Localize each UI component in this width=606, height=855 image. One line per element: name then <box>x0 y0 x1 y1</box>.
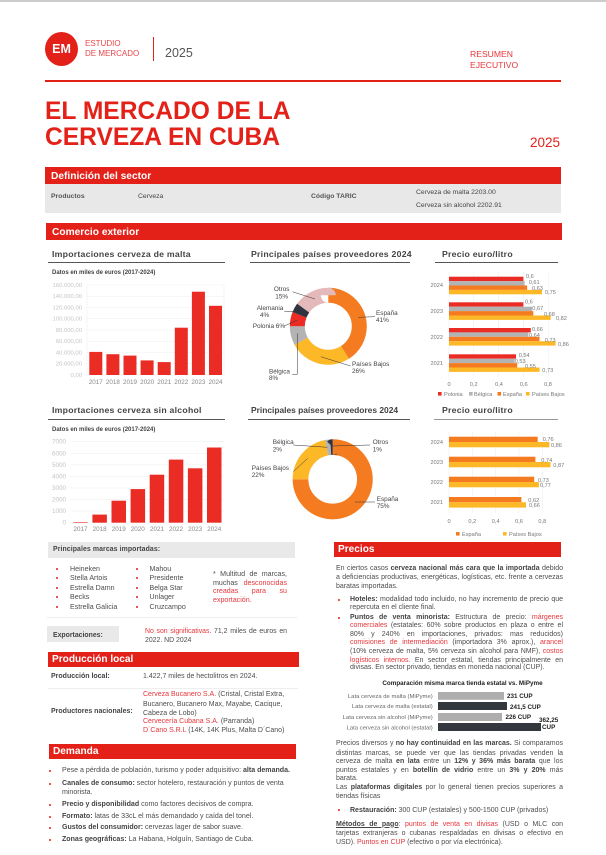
panel: precios conclusiones: tiendas físicas <box>336 793 380 800</box>
donut chart: Polonia 6% <box>253 323 285 330</box>
report type: EJECUTIVO <box>470 60 518 70</box>
horizontal bar chart <box>430 272 569 398</box>
panel: precios conclusiones: distintas marcas, se puede ver que las tiendas privadas venden la <box>336 750 563 757</box>
bar chart: 1000 <box>52 508 66 515</box>
heading: producción local <box>48 652 299 667</box>
bar chart: 2018 <box>106 379 120 386</box>
logo text: DE MERCADO <box>85 49 139 58</box>
bar chart: 2023 <box>191 379 206 386</box>
heading: comercio exterior: Comercio exterior <box>52 227 139 238</box>
horizontal bar chart: 0,66 <box>532 327 543 333</box>
panel: precios texto: divisas. En sector privado, tiendas en moneda nacional (CUP). <box>350 664 545 671</box>
panel: precios conclusiones: cerveza de malta en lata entre un 12% y 36% más barata que los <box>336 758 563 765</box>
bar chart <box>53 283 224 386</box>
bar chart: 40.000,00 <box>56 350 83 356</box>
bar chart: 3000 <box>52 485 66 492</box>
horizontal bar chart: 0 <box>447 519 451 525</box>
note: exportación. <box>213 596 252 604</box>
panel: precios texto: a deficiencias productivas, energéticas, logísticas, etc. frente a cervezas <box>336 574 563 580</box>
horizontal bar chart: 0,63 <box>532 286 543 292</box>
panel: precios conclusiones: barata. <box>336 775 358 782</box>
panel: producción local: Bucanero, Bucanero Max, Mayabe, Cacique, <box>143 700 282 708</box>
panel: demanda: Gustos del consumidor: cervezas lager de sabor suave. <box>62 824 243 831</box>
bar chart: 0 <box>62 520 66 527</box>
subtitle: Datos en miles de euros (2017-2024) <box>52 427 155 433</box>
report type <box>470 49 518 70</box>
panel: precios conclusiones: Restauración: 300 CUP (estatales) y 500-1500 CUP (privados) <box>350 807 548 814</box>
horizontal bar chart: 2024 <box>431 283 443 289</box>
bar chart: 80.000,00 <box>56 328 83 334</box>
panel: importaciones cerveza sin alcohol <box>48 405 225 533</box>
heading: Principales países proveedores 2024 <box>251 249 412 259</box>
horizontal bar chart: 0,76 <box>543 437 554 443</box>
donut chart: Países Bajos <box>252 465 289 472</box>
subtitle: Datos en miles de euros (2017-2024) <box>52 270 155 276</box>
comparison bar chart: CUP <box>542 724 555 731</box>
horizontal bar chart: España <box>462 532 482 538</box>
donut chart: 2% <box>273 446 282 453</box>
horizontal bar chart: 0,4 <box>492 519 500 525</box>
product row: Código TARIC <box>311 193 357 200</box>
heading: Importaciones cerveza de malta <box>52 249 191 259</box>
icon: EM circle <box>45 32 78 66</box>
text: 0,86 <box>558 342 569 348</box>
label <box>47 626 119 642</box>
panel: demanda: Precio y disponibilidad como factores decisivos de compra. <box>62 801 254 808</box>
brand list <box>56 565 186 611</box>
donut chart: 8% <box>269 375 279 382</box>
title: EL MERCADO DE LA <box>45 98 290 125</box>
horizontal bar chart: Países Bajos <box>532 392 565 398</box>
panel: principales marcas importadas <box>47 542 297 618</box>
panel: precio euro/litro malta <box>430 249 569 398</box>
donut chart: 41% <box>376 317 389 324</box>
heading: precios: Precios <box>338 544 374 555</box>
product row <box>51 189 502 209</box>
brand list: Mahou <box>150 565 171 573</box>
donut chart <box>253 286 398 382</box>
horizontal bar chart: 0,86 <box>551 443 562 449</box>
value: No son significativas. 71,2 miles de euros en <box>145 628 287 635</box>
heading: Precio euro/litro <box>442 405 513 415</box>
logo text <box>85 39 139 58</box>
chart title: Comparación misma marca tienda estatal vs. MiPyme <box>382 680 543 687</box>
icon: EM circle: EM <box>52 42 71 56</box>
panel: principales países proveedores sin alcohol <box>248 405 410 520</box>
product row: Cerveza sin alcohol 2202.91 <box>416 202 502 209</box>
horizontal bar chart: 2021 <box>431 500 443 506</box>
panel: demanda: Pese a pérdida de población, turismo y poder adquisitivo: alta demanda. <box>62 767 290 774</box>
bar chart: 2021 <box>157 379 172 386</box>
panel: demanda: Zonas geográficas: La Habana, Holguín, Santiago de Cuba. <box>62 836 254 843</box>
horizontal bar chart: 0,66 <box>529 503 540 509</box>
value <box>145 628 287 644</box>
donut chart: Otros <box>274 286 290 293</box>
heading: precios <box>334 542 561 557</box>
bar chart: 60.000,00 <box>56 339 83 345</box>
horizontal bar chart: 0,75 <box>545 290 556 296</box>
comparison bar chart: 241,5 CUP <box>510 704 541 711</box>
bar chart: 2000 <box>52 497 66 504</box>
bar chart: 120.000,00 <box>53 306 83 312</box>
donut chart: Países Bajos <box>352 361 389 368</box>
horizontal bar chart: 0,62 <box>528 498 539 504</box>
horizontal bar chart: 0,8 <box>544 382 552 388</box>
heading: Principales marcas importadas: <box>53 546 160 553</box>
horizontal bar chart: Países Bajos <box>509 532 542 538</box>
heading: demanda <box>49 744 296 759</box>
panel: definición del sector <box>45 167 561 213</box>
bar chart: 2018 <box>93 526 107 533</box>
horizontal bar chart: 0,6 <box>525 299 533 305</box>
panel: demanda <box>49 766 290 843</box>
bar chart: 2020 <box>140 379 155 386</box>
header year: 2025 <box>165 46 193 60</box>
panel: precios conclusiones: tarjetas extranjeras o cubanas respaldadas en divisas o efectivo en <box>336 830 563 837</box>
comparison bar chart: 362,25 <box>539 717 559 724</box>
heading: Definición del sector <box>51 171 151 182</box>
horizontal bar chart: 0,4 <box>495 382 503 388</box>
comparison bar chart: Lata cerveza sin alcohol (MiPyme) <box>343 715 433 721</box>
bar chart: 2017 <box>89 379 103 386</box>
panel: precios conclusiones: Precios diversos y no hay continuidad en las marcas. Si comparamos <box>336 740 563 747</box>
donut chart: 22% <box>252 472 265 479</box>
panel: precios texto: 80% y 240% en importaciones, privados: mas reducidos) <box>350 631 563 638</box>
product row: Productos <box>51 193 85 200</box>
brand list: Stella Artois <box>70 574 107 582</box>
donut chart: 26% <box>352 368 365 375</box>
panel: precios texto: Hoteles: modalidad todo incluido, no hay incremento de precio que <box>350 596 563 602</box>
horizontal bar chart: 2021 <box>431 361 443 367</box>
panel: precios conclusiones: Las plataformas digitales por lo general tienen precios superiores a <box>336 784 563 791</box>
panel: precio euro/litro sin alcohol <box>430 405 564 538</box>
comparison bar chart <box>343 680 559 732</box>
logo text: ESTUDIO <box>85 39 121 48</box>
panel: precios conclusiones <box>336 740 563 846</box>
horizontal bar chart: 2024 <box>431 440 443 446</box>
panel: precios conclusiones: Métodos de pago: puntos de venta en divisas (USD o MLC con <box>336 820 563 828</box>
comparison bar chart: 231 CUP <box>507 693 533 700</box>
heading: Importaciones cerveza sin alcohol <box>52 405 202 415</box>
bar chart: 2023 <box>188 526 203 533</box>
panel: precios texto: repercuta en el cliente final. <box>350 604 436 611</box>
panel: producción local: 1.422,7 miles de hectolitros en 2024. <box>143 673 257 680</box>
horizontal bar chart: 0,87 <box>553 463 564 469</box>
brand list: Heineken <box>70 565 100 573</box>
note: * Multitud de marcas, <box>213 570 287 578</box>
panel: importaciones cerveza de malta <box>48 249 225 386</box>
label: Exportaciones: <box>53 632 103 639</box>
heading: Precio euro/litro <box>442 249 513 259</box>
donut chart: 1% <box>373 446 382 453</box>
production row: Producción local: <box>51 673 110 680</box>
product row: Cerveza de malta 2203.00 <box>416 189 496 196</box>
panel: precios texto: baratas importadas. <box>336 583 398 590</box>
brand list: Presidente <box>150 574 183 582</box>
horizontal bar chart: 2023 <box>431 460 443 466</box>
heading <box>48 542 295 558</box>
brand list: Unlager <box>150 593 174 601</box>
brand list: Cruzcampo <box>150 603 186 611</box>
horizontal bar chart: 2022 <box>431 480 443 486</box>
donut chart: 15% <box>275 293 288 300</box>
bar chart: 2024 <box>207 526 222 533</box>
horizontal bar chart: 0,67 <box>532 306 543 312</box>
bar chart: 20.000,00 <box>56 362 83 368</box>
horizontal bar chart: 0,6 <box>526 274 534 280</box>
panel: producción local <box>48 672 298 734</box>
report type: RESUMEN <box>470 49 513 59</box>
horizontal bar chart: 0,68 <box>544 312 555 318</box>
comparison bar chart: Lata cerveza de malta (estatal) <box>352 704 433 710</box>
header logo <box>45 32 193 66</box>
value: 2022. ND 2024 <box>145 637 191 644</box>
heading: comercio exterior <box>46 223 562 240</box>
donut chart: Otros <box>373 439 388 446</box>
horizontal bar chart: Bélgica <box>474 392 493 398</box>
horizontal bar chart: 0,2 <box>468 519 476 525</box>
bar chart: 2019 <box>112 526 126 533</box>
panel: precios texto: Puntos de venta minorista: Estructura de precio: márgenes <box>350 614 563 620</box>
panel: demanda: Formato: latas de 33cL el más demandado y caída del tonel. <box>62 813 253 820</box>
title year: 2025 <box>530 135 560 150</box>
bar chart: 6000 <box>52 450 66 457</box>
horizontal bar chart <box>430 432 564 538</box>
horizontal bar chart: 0,73 <box>538 478 549 484</box>
horizontal bar chart: 0,2 <box>470 382 478 388</box>
horizontal bar chart: 0,6 <box>520 382 528 388</box>
comparison bar chart: Lata cerveza de malta (MiPyme) <box>348 694 433 700</box>
horizontal bar chart: 0,73 <box>545 338 556 344</box>
horizontal bar chart: 0 <box>447 382 451 388</box>
bar chart: 100.000,00 <box>53 317 83 323</box>
donut chart: 75% <box>377 503 390 510</box>
bar chart: 4000 <box>52 473 66 480</box>
horizontal bar chart: España <box>503 392 523 398</box>
panel: precios texto: (10% cerveza de malta, 5% cerveza sin alcohol para NMF), costos <box>350 648 563 655</box>
donut chart: Alemania <box>257 305 284 312</box>
panel: principales países proveedores malta <box>250 249 412 382</box>
bar chart: 7000 <box>52 439 66 446</box>
horizontal bar chart: 0,54 <box>519 353 530 359</box>
panel: demanda: Canales de consumo: sector hotelero, restauración y puntos de venta <box>62 780 284 787</box>
brand list: Belga Star <box>150 584 183 592</box>
bar chart: 140.000,00 <box>53 294 83 300</box>
bar chart: 2017 <box>73 526 88 533</box>
panel: precios conclusiones: puntos estatales y en botellín de vidrio entre un 3% y 20% más <box>336 767 563 774</box>
title: CERVEZA EN CUBA <box>45 124 280 150</box>
brand list: Estrella Damn <box>70 584 115 592</box>
horizontal bar chart: 2022 <box>431 335 443 341</box>
horizontal bar chart: 0,74 <box>541 458 552 464</box>
bar chart: 2021 <box>150 526 164 533</box>
brand list: Estrella Galicia <box>70 603 117 611</box>
bar chart: 2020 <box>131 526 145 533</box>
donut chart: Bélgica <box>269 368 290 375</box>
panel: precios conclusiones: USD). Puntos en CUP (efectivo o por vía electrónica). <box>336 838 503 846</box>
donut chart: España <box>376 310 398 317</box>
bar chart: 2022 <box>169 526 183 533</box>
bar chart: 2019 <box>123 379 137 386</box>
panel: precios texto: En ciertos casos cerveza nacional más cara que la importada debido <box>336 564 563 572</box>
panel: producción local: D´Cano S.R.L (14K, 14K Plus, Malta D´Cano) <box>143 726 284 734</box>
horizontal bar chart: 2023 <box>431 309 443 315</box>
comparison bar chart: 226 CUP <box>506 714 531 721</box>
panel: exportaciones <box>47 626 287 644</box>
note <box>213 570 287 604</box>
panel: producción local: Cerveza Bucanero S.A. (Cristal, Cristal Extra, <box>143 691 284 698</box>
bar chart: 2022 <box>174 379 189 386</box>
horizontal bar chart: 0,55 <box>525 364 536 370</box>
panel: demanda: minorista. <box>62 789 93 796</box>
horizontal bar chart: 0,61 <box>529 280 540 286</box>
bar chart: 160.000,00 <box>53 283 83 289</box>
note: muchas desconocidas <box>213 579 287 587</box>
donut chart: Bélgica <box>273 439 294 446</box>
donut chart: 4% <box>260 312 270 319</box>
bar chart <box>52 439 224 533</box>
panel: precios texto: comisiones de intermediación (importadora 3% aprox.), arancel <box>350 639 563 646</box>
text: 0,82 <box>556 316 567 322</box>
panel: precios texto: comerciales (estatales: 60% sobre productos en plaza o entre el <box>350 622 563 629</box>
heading: producción local: Producción local <box>52 654 133 665</box>
note: creadas para su <box>213 587 287 595</box>
donut chart <box>252 439 399 520</box>
bar chart: 0,00 <box>71 373 83 379</box>
horizontal bar chart: 0,53 <box>515 359 526 365</box>
horizontal bar chart: 0,73 <box>542 368 553 374</box>
heading: demanda: Demanda <box>53 746 98 757</box>
bar chart: 5000 <box>52 462 66 469</box>
brand list: Becks <box>70 593 89 601</box>
title <box>45 98 290 150</box>
horizontal bar chart: 0,8 <box>538 519 546 525</box>
horizontal bar chart: 0,6 <box>515 519 523 525</box>
product row: Cerveza <box>138 193 163 200</box>
panel: precios texto <box>336 564 563 671</box>
comparison bar chart: Lata cerveza sin alcohol (estatal) <box>347 726 433 732</box>
bar chart: 2024 <box>208 379 223 386</box>
producers: Productores nacionales: <box>51 708 133 714</box>
heading: Principales países proveedores 2024 <box>251 405 398 415</box>
panel: producción local: Cervecería Cubana S.A. (Parranda) <box>143 718 254 724</box>
horizontal bar chart: 0,64 <box>529 333 540 339</box>
heading <box>45 167 561 184</box>
horizontal bar chart: 0,77 <box>540 483 551 489</box>
panel: precios texto: logísticos internos. En sector estatal, tiendas principalmente en <box>350 657 563 664</box>
horizontal bar chart: Polonia <box>444 392 464 398</box>
donut chart: España <box>377 496 399 503</box>
panel: producción local: Cabeza de Lobo) <box>143 710 197 716</box>
